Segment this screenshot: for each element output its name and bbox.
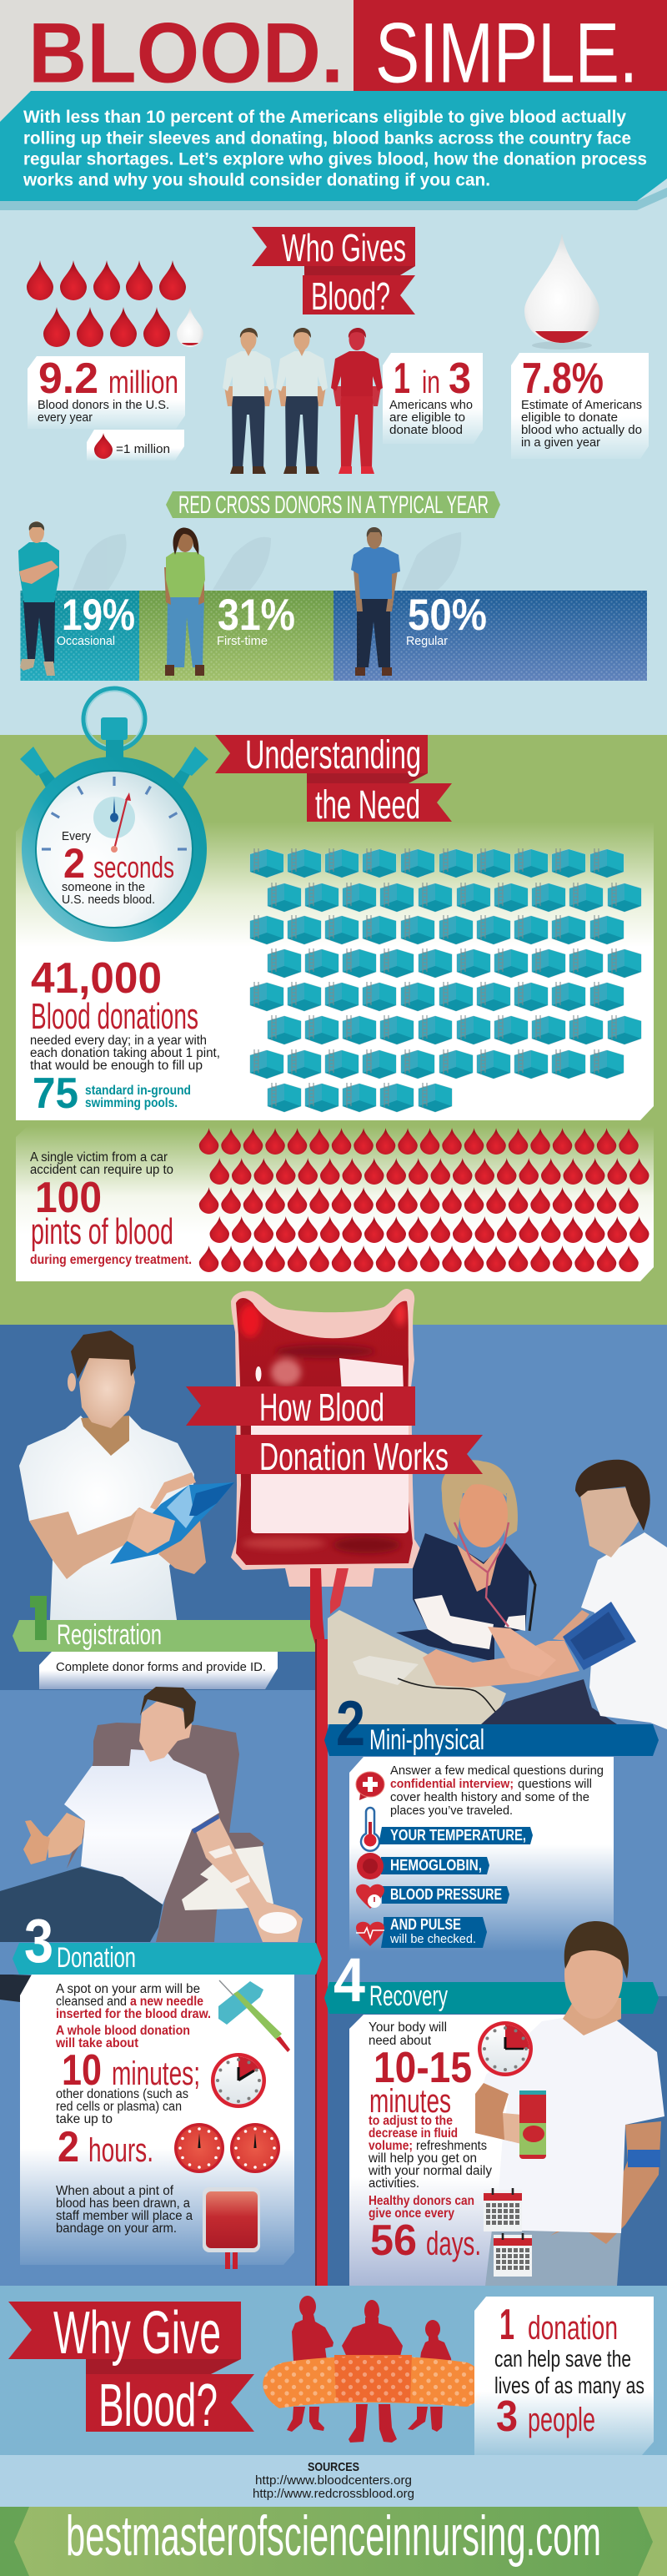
stat card: 1 in 3: 1: [394, 355, 410, 403]
background: understanding the need section: [0, 735, 667, 1325]
body text: need about: [369, 2034, 432, 2048]
stat card: 7.8 percent: [511, 353, 649, 459]
banner: step 1 registration: [13, 1596, 322, 1652]
icon: two hour clocks: [174, 2123, 280, 2173]
stat card: 1 in 3: Americans who: [389, 398, 473, 412]
ribbon: and pulse: will be checked.: [389, 1932, 476, 1946]
sources: http://www.bloodcenters.org: [255, 2473, 412, 2488]
sources: http://www.redcrossblood.org: [253, 2487, 414, 2501]
pictogram: 75 swimming pools: [250, 848, 641, 1112]
panel: donation card: 2: [58, 2123, 79, 2171]
monitor: [353, 1656, 419, 1685]
intro text: works and why you should consider donating if you can.: [23, 170, 490, 190]
card: one donation saves three: [474, 2297, 654, 2455]
panel: daily need: [16, 822, 654, 1120]
text block: 41,000 blood donations: Blood donations: [31, 996, 198, 1037]
jeans: [0, 1867, 163, 1942]
step title: Registration: [57, 1619, 162, 1651]
body text: places you’ve traveled.: [390, 1804, 513, 1818]
stat card: 1 in 3: 3: [449, 355, 471, 403]
nurse: [396, 1460, 535, 1662]
step title: Donation: [57, 1942, 136, 1974]
banner: how blood donation works: Donation Works: [259, 1435, 449, 1478]
body text: bandage on your arm.: [56, 2221, 177, 2236]
banner: red cross donors: RED CROSS DONORS IN A TYPICAL YEAR: [178, 491, 489, 519]
body text: A whole blood donation: [56, 2024, 190, 2038]
step banner: [324, 1724, 659, 1756]
card: one donation saves three: 1: [499, 2301, 514, 2349]
text block: 100 pints: 100: [35, 1174, 102, 1222]
panel: step 4 recovery: days.: [426, 2226, 481, 2262]
text block: 100 pints: accident can require up to: [30, 1163, 173, 1177]
illustration: nurse and patient: [328, 1460, 667, 1729]
body text: [368, 2020, 492, 2221]
arms: [29, 1507, 178, 1579]
illustration: person registering: [19, 1331, 234, 1620]
text block: 41,000 blood donations: needed every day; in a year with: [30, 1034, 207, 1048]
body text: a new needle: [130, 1995, 203, 2009]
recovery card: [349, 2015, 617, 2286]
icon: stopwatch: seconds: [93, 850, 174, 884]
banner: who gives blood: [252, 226, 415, 318]
body text: refreshments: [416, 2139, 487, 2153]
body text: take up to: [56, 2112, 113, 2126]
panel: step 4 recovery: 56: [370, 2216, 417, 2265]
banner: who gives blood: Blood?: [311, 274, 390, 318]
stacked bar: donor types: Regular: [406, 634, 448, 648]
banner: understanding the need: [215, 733, 452, 828]
number 2: 2: [336, 1688, 365, 1759]
heading text: How Blood: [259, 1386, 384, 1429]
ribbon: blood pressure: BLOOD PRESSURE: [390, 1886, 502, 1903]
header: [0, 0, 667, 125]
stat card: 7.8 percent: 7.8%: [522, 355, 604, 403]
panel: step 4 recovery: [324, 1921, 664, 2286]
thumbs-up arm: [48, 1813, 85, 1858]
backgrounds: how blood donation works: [0, 1325, 667, 2286]
bag tubes: [310, 1568, 349, 1656]
intro text: With less than 10 percent of the Americans eligible to give blood actually: [23, 108, 626, 127]
icon: fifteen minute clock: [478, 2021, 533, 2076]
polo shirt: [19, 1416, 194, 1620]
body text: activities.: [369, 2176, 419, 2191]
panel: donation card: hours.: [88, 2132, 153, 2169]
stat card: 7.8 percent: blood who actually do: [521, 423, 642, 437]
body text: staff member will place a: [56, 2209, 193, 2223]
text block: 100 pints: [30, 1150, 192, 1267]
text block: 41,000 blood donations: 75: [33, 1069, 78, 1118]
stat card: 1 in 3: [383, 353, 483, 444]
hands: [127, 1508, 175, 1553]
panel: donation card: [20, 1975, 294, 2269]
body text: give once every: [369, 2206, 454, 2221]
stat card: 9.2 million: 9.2: [38, 355, 98, 403]
card: registration text: Complete donor forms and provide ID.: [56, 1660, 266, 1674]
card: one donation saves three: donation: [528, 2310, 618, 2347]
stat card: 1 in 3: are eligible to: [389, 410, 465, 425]
red tube line: [315, 1639, 328, 2286]
stacked bar: donor types: First-time: [217, 634, 268, 648]
body text: will take about: [55, 2036, 138, 2050]
stacked bar: donor types: Occasional: [57, 634, 115, 648]
step title: Recovery: [369, 1980, 448, 2012]
silhouette: middle person: [342, 2300, 403, 2443]
intro text: regular shortages. Let’s explore who gives blood, how the donation process: [23, 150, 647, 169]
text block: 41,000 blood donations: standard in-ground: [85, 1084, 191, 1098]
banner: step 3 donation: [13, 1906, 322, 1975]
body text: [390, 1763, 604, 1818]
card: one donation saves three: people: [528, 2402, 595, 2438]
body text: cover health history and some of the: [390, 1790, 589, 1804]
card: registration text: [39, 1652, 278, 1689]
background: who gives blood section: [0, 200, 667, 735]
body text: will help you get on: [368, 2151, 477, 2166]
table: [328, 1610, 506, 1724]
icon: red blood cell: [357, 1853, 384, 1879]
neck: [81, 1416, 129, 1456]
pictogram: 100 pints of blood: [199, 1128, 649, 1272]
body text: to adjust to the: [369, 2114, 453, 2128]
text block: 41,000 blood donations: 41,000: [31, 954, 162, 1003]
stacked bar: donor types: [18, 521, 647, 681]
sources: SOURCES: [308, 2460, 359, 2474]
illustration: person donating: [0, 1687, 303, 2002]
body text: cleansed and: [56, 1995, 127, 2009]
number 4: 4: [334, 1945, 365, 2015]
silhouette: right person: [408, 2320, 452, 2432]
banner: understanding the need: the Need: [315, 783, 420, 828]
icon: stopwatch: someone in the: [62, 880, 145, 894]
ribbon: temperature: YOUR TEMPERATURE,: [390, 1827, 526, 1844]
head: [139, 1700, 192, 1762]
panel: donation card: minutes;: [112, 2055, 200, 2092]
banner: how blood donation works: [186, 1386, 483, 1478]
icon: bandage: [263, 2355, 483, 2408]
number 3: 3: [24, 1906, 53, 1975]
stat card: 1 in 3: in: [422, 365, 440, 400]
stacked bar: donor types: 50%: [408, 591, 487, 640]
icon: stopwatch: [20, 688, 208, 942]
text block: 100 pints: A single victim from a car: [30, 1150, 168, 1165]
background: why give blood: [0, 2286, 667, 2455]
sources: [0, 2455, 667, 2507]
arm with stress ball: [194, 1816, 303, 1942]
text block: 100 pints: during emergency treatment.: [30, 1253, 192, 1267]
silhouettes with bandage: [263, 2296, 483, 2443]
stat card: 9.2 million: Blood donors in the U.S.: [38, 398, 169, 412]
stopwatch text: Every: [62, 829, 91, 843]
patient: [423, 1460, 667, 1729]
stat card: 9.2 million: [28, 355, 185, 429]
panel: step 2 mini-physical: [324, 1688, 659, 1952]
icon: stopwatch: 2: [63, 840, 85, 887]
silhouette: left person: [287, 2296, 334, 2432]
panel: step 4 recovery: minutes: [369, 2083, 451, 2120]
face: [68, 1373, 76, 1391]
body text: Healthy donors can: [369, 2194, 474, 2208]
intro panel: [0, 91, 667, 210]
hair: [71, 1331, 136, 1379]
icon: medical speech bubble: [356, 1772, 384, 1800]
mini-physical card: [349, 1757, 614, 1952]
icon: large white drop 7.8 percent: [524, 234, 599, 350]
body text: When about a pint of: [56, 2184, 174, 2198]
ribbon: and pulse: AND PULSE: [390, 1916, 461, 1933]
card: one donation saves three: 3: [496, 2392, 518, 2441]
body text: questions will: [518, 1777, 592, 1791]
body text: blood has been drawn, a: [56, 2196, 190, 2211]
body text: other donations (such as: [56, 2087, 188, 2101]
stat card: 7.8 percent: eligible to donate: [521, 410, 618, 425]
body text: decrease in fluid: [369, 2126, 458, 2141]
three men illustration: [223, 328, 383, 474]
banner: why give blood: Blood?: [98, 2372, 218, 2439]
body text: Answer a few medical questions during: [390, 1763, 604, 1778]
body text: volume;: [369, 2139, 413, 2153]
percentages: 19%: [62, 591, 135, 640]
stat card: 9.2 million: million: [108, 365, 178, 400]
icon: heart with pulse: [356, 1922, 384, 1946]
text block: 100 pints: pints of blood: [31, 1211, 173, 1252]
icon row: 9.2 million drops: [27, 260, 203, 347]
stat card: 7.8 percent: in a given year: [521, 435, 600, 450]
icon: butterfly needle: [218, 1980, 290, 2052]
legend: one drop equals one million: =1 million: [116, 442, 170, 456]
icon: thermometer: [361, 1808, 379, 1851]
shirt: [64, 1749, 219, 1904]
stacked bar: donor types: 31%: [218, 591, 295, 640]
body text: red cells or plasma) can: [56, 2100, 182, 2114]
heading text: Who Gives: [282, 226, 406, 269]
intro text: [23, 108, 647, 190]
chair: [67, 1723, 264, 1942]
person: first-time: [164, 527, 205, 676]
icon: ten minute clock: [211, 2053, 266, 2108]
ribbon: hemoglobin: HEMOGLOBIN,: [390, 1857, 482, 1874]
intro text: rolling up their sleeves and donating, blood banks across the country face: [23, 128, 631, 148]
text block: 41,000 blood donations: each donation taking about 1 pint,: [30, 1046, 220, 1060]
title: Blood.: BLOOD.: [28, 5, 344, 100]
banner: why give blood: [8, 2300, 254, 2439]
legend: one drop equals one million: [87, 430, 184, 460]
large numbers: 10: [62, 2046, 102, 2095]
large numbers: 10-15: [374, 2044, 472, 2092]
heading text: Why Give: [53, 2300, 221, 2367]
stat card: 9.2 million: every year: [38, 410, 93, 425]
icon: stopwatch: U.S. needs blood.: [62, 893, 155, 907]
icon: small blood bag: [203, 2187, 260, 2269]
person: regular: [351, 527, 400, 676]
icon: heart with gauge: [356, 1884, 384, 1909]
number 1: [30, 1596, 47, 1640]
body text: A spot on your arm will be: [56, 1982, 200, 1996]
body text: [55, 1982, 211, 2236]
clipboard: [110, 1482, 234, 1564]
body text: inserted for the blood draw.: [56, 2007, 211, 2021]
text block: 41,000 blood donations: swimming pools.: [85, 1096, 178, 1110]
body text: confidential interview;: [390, 1777, 514, 1791]
banner: red cross donors: [166, 491, 500, 519]
text block: 41,000 blood donations: that would be enough to fill up: [30, 1059, 203, 1073]
towel: [182, 1846, 273, 1910]
person: occasional: [18, 521, 59, 676]
icon: calendars: [484, 2188, 532, 2277]
text block: 41,000 blood donations: [30, 954, 220, 1118]
body text: Your body will: [369, 2020, 447, 2035]
illustration: blood bag: [225, 1289, 425, 1656]
step title: Mini-physical: [369, 1724, 484, 1756]
stat card: 7.8 percent: Estimate of Americans: [521, 398, 642, 412]
illustration: person recovering: [475, 1921, 664, 2286]
heading text: Understanding: [245, 733, 421, 777]
donor shadows: [73, 532, 461, 590]
panel: emergency need: [16, 1126, 654, 1281]
ribbon: and pulse: [381, 1916, 487, 1948]
body text: with your normal daily: [368, 2164, 492, 2178]
stat card: 1 in 3: donate blood: [389, 423, 463, 437]
step banner: [324, 1982, 659, 2014]
